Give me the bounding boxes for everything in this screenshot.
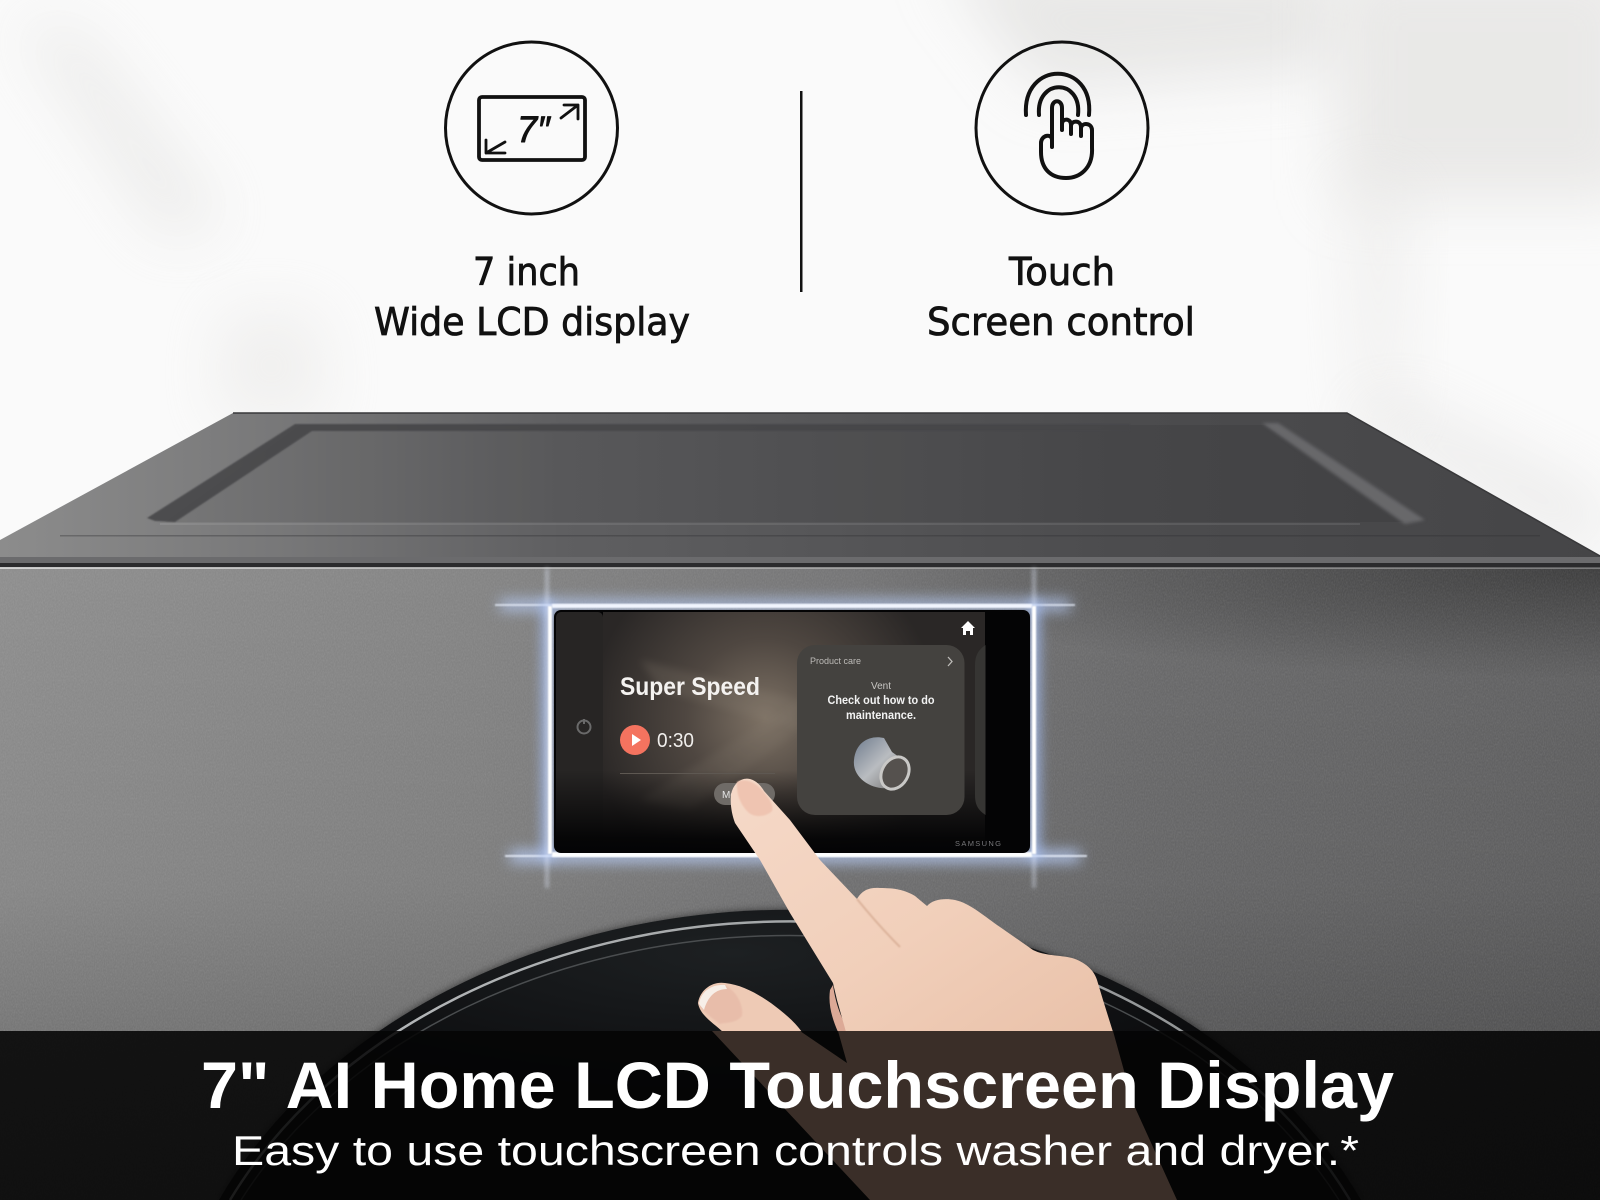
LCD screen bbox=[554, 610, 1030, 853]
icon: 7 inch display: 7″ bbox=[517, 109, 552, 150]
text block: 7 inch label: 7 inch bbox=[473, 250, 580, 294]
divider bbox=[800, 91, 802, 292]
thumb bbox=[698, 983, 802, 1032]
icon: vent duct bbox=[854, 737, 915, 794]
caption bar bbox=[0, 1031, 1600, 1200]
icon: home bbox=[961, 621, 975, 635]
icon: power bbox=[578, 719, 590, 734]
text block: 7 inch label: Wide LCD display bbox=[374, 300, 690, 344]
title: 7" AI Home LCD Touchscreen Display bbox=[201, 1048, 1394, 1122]
next card sliver bbox=[975, 645, 986, 815]
touchscreen glow frame bbox=[495, 568, 1087, 888]
text block: touch label: Screen control bbox=[927, 300, 1195, 344]
icon: touch bbox=[976, 42, 1148, 214]
text block: 7 inch label bbox=[374, 250, 690, 344]
time: 0:30 bbox=[657, 730, 694, 752]
product care card: Check out how to do bbox=[828, 695, 934, 707]
index finger and back of hand bbox=[731, 779, 1113, 1032]
washer door bbox=[219, 910, 1361, 1200]
text block: touch label: Touch bbox=[1008, 250, 1115, 294]
subtitle: Easy to use touchscreen controls washer and dryer.* bbox=[232, 1127, 1359, 1174]
machine top bbox=[0, 413, 1600, 569]
machine front panel bbox=[0, 569, 1600, 1200]
icon: play button bbox=[620, 725, 650, 755]
program title: Super Speed bbox=[620, 673, 760, 701]
product care card bbox=[797, 645, 964, 815]
hand bbox=[698, 779, 1113, 1032]
icon: 7 inch display bbox=[446, 42, 618, 214]
more button bbox=[714, 783, 775, 805]
text block: touch label bbox=[927, 250, 1195, 344]
hand seen through the caption bar bbox=[712, 1031, 1177, 1200]
more button: More bbox=[722, 790, 745, 801]
product care card: Product care bbox=[810, 656, 861, 666]
fingernail bbox=[737, 780, 773, 816]
product care card: maintenance. bbox=[846, 710, 916, 722]
product care card: Vent bbox=[871, 681, 891, 692]
finger fold bbox=[829, 985, 850, 1032]
brand mark: SAMSUNG bbox=[955, 839, 1001, 848]
